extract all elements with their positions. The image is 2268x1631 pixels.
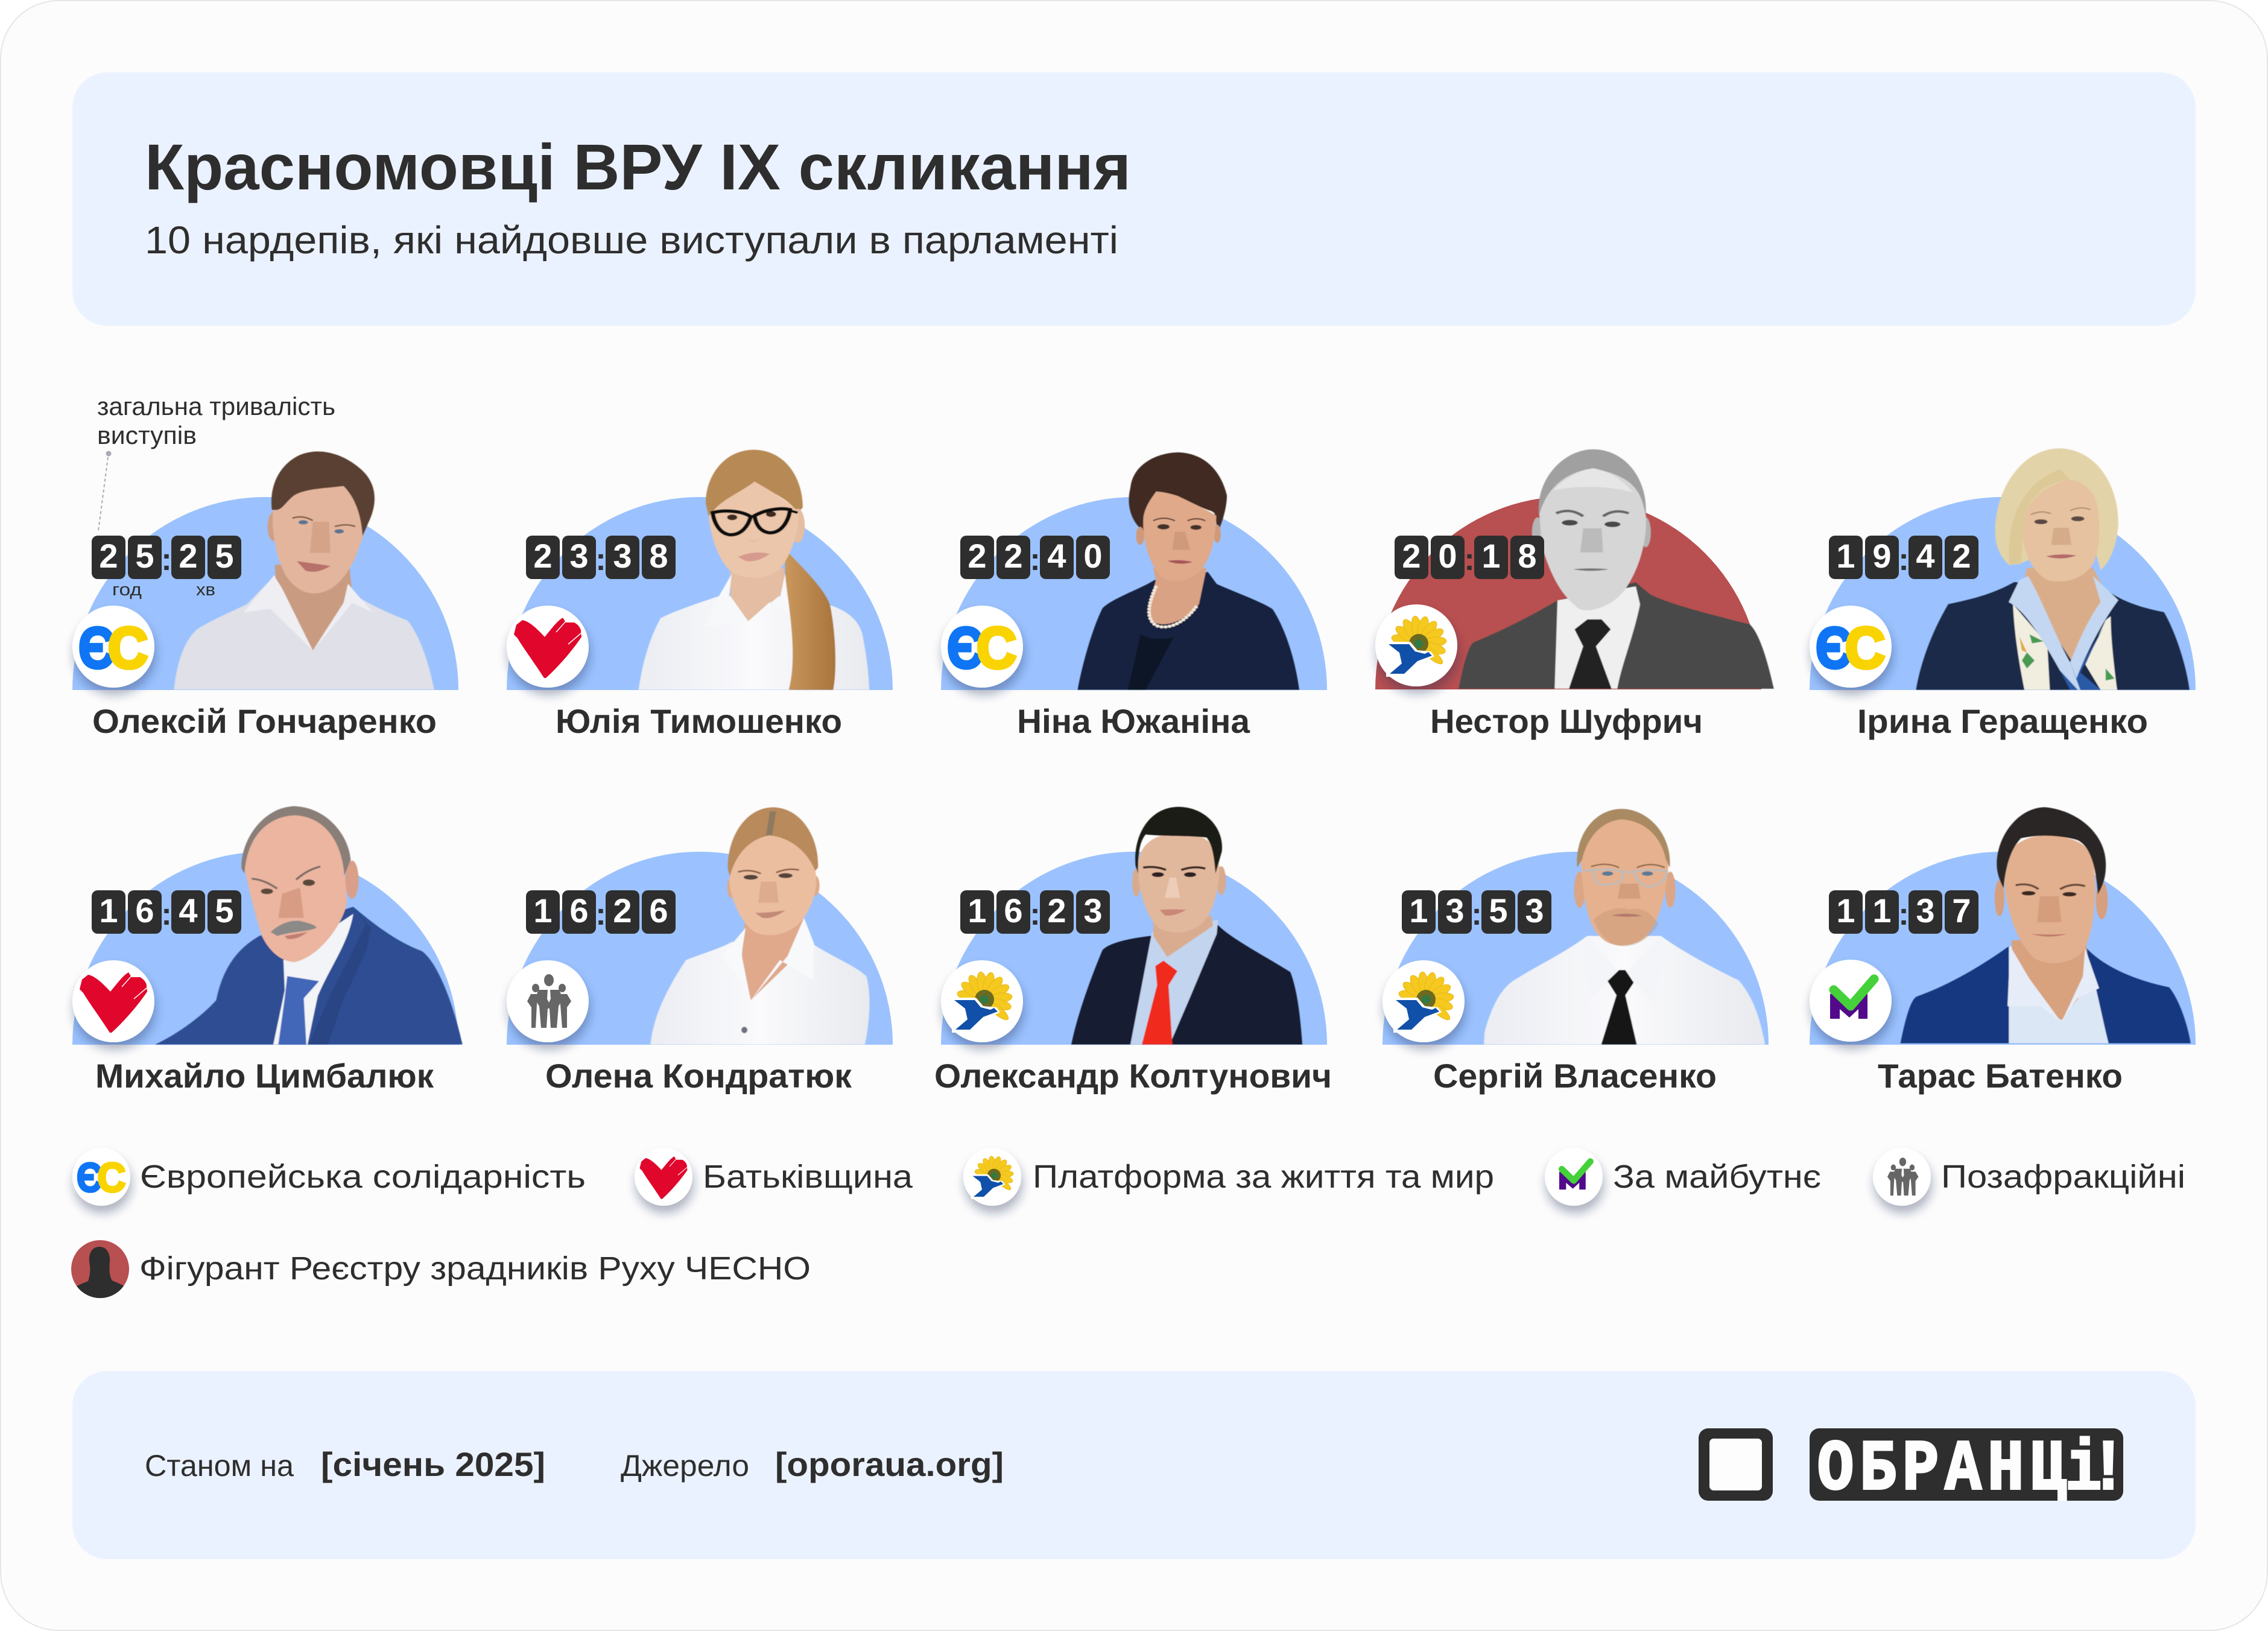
legend item: Позафракційні: Позафракційні	[1941, 1159, 2185, 1195]
legend item: Європейська солідарність: Європейська солідарність	[140, 1159, 586, 1195]
name: Михайло Цимбалюк	[95, 1057, 434, 1095]
semicircle	[941, 852, 1327, 1045]
legend item: За майбутнє	[1545, 1148, 1821, 1206]
name: Ніна Южаніна	[1017, 702, 1250, 740]
party badge	[72, 606, 154, 688]
source label: Джерело	[621, 1449, 749, 1483]
party badge	[941, 960, 1023, 1042]
portrait	[1071, 807, 1302, 1045]
legend item: Батьківщина: Батьківщина	[703, 1159, 913, 1195]
person: Юлія Тимошенко	[507, 450, 893, 740]
flip clock: 25:25	[99, 537, 234, 577]
flip clock: 20:18	[1402, 537, 1537, 577]
portrait	[1484, 809, 1765, 1045]
person: Ніна Южаніна	[941, 452, 1327, 740]
portrait	[174, 452, 434, 689]
annotation: total duration	[97, 392, 335, 531]
person: Нестор Шуфрич	[1375, 449, 1774, 740]
party badge: Є	[947, 616, 983, 680]
portrait	[155, 806, 463, 1045]
party badge: Є	[78, 616, 115, 680]
flip clock: 22:40	[968, 537, 1103, 577]
panel: header	[72, 72, 2196, 326]
name: Олександр Колтунович	[934, 1057, 1332, 1095]
semicircle	[507, 497, 893, 690]
semicircle	[1810, 852, 2196, 1045]
party badge	[507, 606, 589, 688]
party badge: С	[977, 616, 1016, 680]
flip clock: 19:42	[1836, 537, 1971, 577]
semicircle	[72, 497, 458, 690]
panel: footer	[72, 1371, 2196, 1559]
portrait	[639, 450, 869, 690]
legend item: Європейська солідарність	[72, 1148, 586, 1206]
semicircle	[1383, 852, 1769, 1045]
portrait	[650, 807, 869, 1045]
person: Сергій Власенко	[1383, 809, 1769, 1095]
name: Нестор Шуфрич	[1430, 702, 1703, 740]
party badge	[1383, 960, 1465, 1042]
semicircle	[507, 852, 893, 1045]
legend	[71, 1148, 2185, 1303]
flip clock: 11:37	[1836, 892, 1971, 932]
name: Олена Кондратюк	[545, 1057, 852, 1095]
legend item: Європейська солідарність: Є	[77, 1156, 102, 1201]
party badge	[1375, 604, 1457, 686]
flip clock: хв	[196, 580, 215, 600]
party badge	[72, 960, 154, 1042]
flip clock	[92, 536, 241, 600]
person: Ірина Геращенко	[1810, 448, 2196, 740]
party badge: С	[108, 616, 148, 680]
portrait	[1459, 449, 1774, 689]
semicircle	[1375, 496, 1761, 689]
legend item: Європейська солідарність: С	[98, 1156, 125, 1201]
annotation: total duration: виступів	[97, 421, 197, 449]
semicircle	[941, 497, 1327, 690]
semicircle	[1810, 497, 2196, 690]
person: Тарас Батенко	[1810, 807, 2196, 1095]
portrait	[1078, 452, 1299, 690]
date value: [січень 2025]	[321, 1445, 545, 1483]
title: Красномовці ВРУ IX скликання	[145, 130, 1131, 203]
annotation: total duration: загальна тривалість	[97, 392, 335, 420]
subtitle: 10 нардепів, які найдовше виступали в парламенті	[145, 218, 1118, 262]
legend item: Реєстр зрадників: Фігурант Реєстру зрадників Руху ЧЕСНО	[139, 1250, 811, 1287]
flip clock: 13:53	[1409, 892, 1544, 932]
legend item: За майбутнє: За майбутнє	[1613, 1159, 1821, 1195]
party badge: С	[1845, 616, 1885, 680]
party badge	[1810, 960, 1892, 1042]
person: Олена Кондратюк	[507, 807, 893, 1095]
flip clock: 16:26	[533, 892, 668, 932]
flip clock: 16:45	[99, 892, 234, 932]
flip clock: 23:38	[533, 537, 668, 577]
party badge	[507, 960, 589, 1042]
person: Михайло Цимбалюк	[72, 806, 463, 1095]
party badge	[941, 606, 1023, 688]
person: Олексій Гончаренко	[72, 452, 458, 740]
logo: wordmark: ОБРАНЦі!	[1817, 1430, 2126, 1510]
portrait	[1901, 807, 2191, 1044]
logo: square	[1699, 1428, 1773, 1501]
flip clock: 16:23	[968, 892, 1103, 932]
legend item: Платформа за життя та мир: Платформа за життя та мир	[1033, 1159, 1494, 1195]
source value: [oporaua.org]	[775, 1445, 1004, 1483]
flip clock: год	[112, 580, 142, 600]
name: Ірина Геращенко	[1857, 702, 2148, 740]
person: Олександр Колтунович	[934, 807, 1332, 1095]
legend item: Позафракційні	[1873, 1148, 2185, 1206]
name: Юлія Тимошенко	[556, 702, 842, 740]
portrait	[1916, 448, 2190, 690]
semicircle	[72, 852, 458, 1045]
legend item: Батьківщина	[635, 1148, 913, 1206]
name: Сергій Власенко	[1433, 1057, 1717, 1095]
party badge	[1810, 606, 1892, 688]
legend item: Платформа за життя та мир	[963, 1148, 1494, 1206]
party badge: Є	[1816, 616, 1852, 680]
name: Тарас Батенко	[1878, 1057, 2123, 1095]
legend item: Реєстр зрадників	[71, 1240, 811, 1303]
date label: Станом на	[145, 1449, 294, 1483]
name: Олексій Гончаренко	[92, 702, 437, 740]
